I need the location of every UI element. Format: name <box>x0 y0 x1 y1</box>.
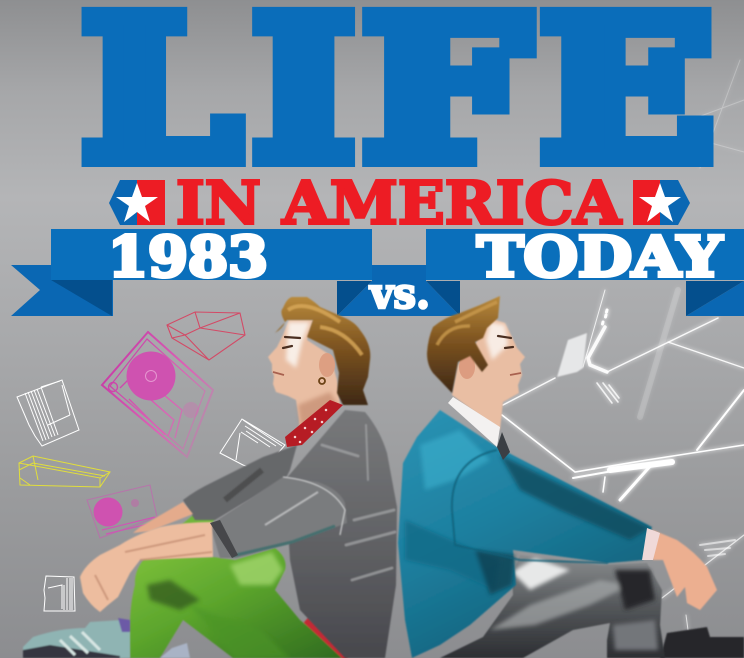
figure: today man <box>398 296 744 658</box>
neck and face <box>452 318 525 430</box>
ear <box>459 355 475 379</box>
left star badge <box>109 180 165 225</box>
circuit block <box>557 333 587 377</box>
jeans <box>440 555 665 658</box>
brow and eye <box>498 336 513 348</box>
mouth <box>273 372 284 375</box>
hand <box>653 530 717 610</box>
figure: 1983 man <box>23 297 397 658</box>
hair highlight <box>288 306 362 355</box>
jacket body <box>285 410 397 658</box>
white collar <box>448 397 500 447</box>
jeans highlights <box>490 558 658 650</box>
right star badge <box>633 180 690 225</box>
lower sleeve <box>210 477 347 558</box>
icon: wireframe box <box>167 312 245 360</box>
hair <box>275 297 370 405</box>
icon: cartridge bottom <box>44 576 75 611</box>
icon: small cassette <box>87 485 157 538</box>
label: today: TODAY <box>477 224 723 289</box>
forearm shading <box>95 535 212 600</box>
sweater arm line <box>452 450 608 563</box>
eye and brow <box>283 337 300 348</box>
forearm upper <box>133 502 193 533</box>
ribbon: center fold <box>337 265 460 316</box>
ear <box>319 353 335 377</box>
label: 1983: 1983 <box>108 224 268 289</box>
circuit lines <box>502 60 744 630</box>
sweater shading <box>405 430 650 595</box>
title: LIFE <box>81 0 715 204</box>
icon: large cassette <box>102 332 213 457</box>
face highlight <box>486 322 508 360</box>
tie <box>497 432 510 460</box>
upper arm <box>183 445 297 520</box>
ribbon: 1983 banner <box>51 229 372 280</box>
icon: cassette reel <box>126 352 176 400</box>
mouth <box>510 373 521 375</box>
face highlight <box>286 322 310 368</box>
white cuff <box>642 528 660 560</box>
sweater <box>398 410 652 658</box>
hair <box>427 296 500 393</box>
black shoes <box>660 627 744 658</box>
icon: yellow wireframe <box>19 456 110 487</box>
earring <box>319 378 325 384</box>
subtitle: in america: IN AMERICA <box>176 168 622 238</box>
icon: cartridge near shoulder <box>220 419 285 472</box>
neck shadow <box>298 392 338 436</box>
legs and trousers <box>130 508 347 658</box>
neck and face <box>268 320 340 440</box>
jacket highlights <box>322 425 395 580</box>
icon: game cartridge left <box>17 380 79 446</box>
ribbon: right tail <box>686 281 744 316</box>
hair highlight <box>437 302 497 345</box>
forearm and hand <box>80 522 213 612</box>
sleeve details <box>225 470 345 556</box>
red scarf <box>285 400 343 447</box>
sneaker <box>23 618 190 658</box>
jacket cuff <box>210 520 238 558</box>
label: vs.: vs. <box>369 269 430 318</box>
ribbon: today banner <box>426 229 744 280</box>
ribbon: left tail <box>11 265 113 316</box>
